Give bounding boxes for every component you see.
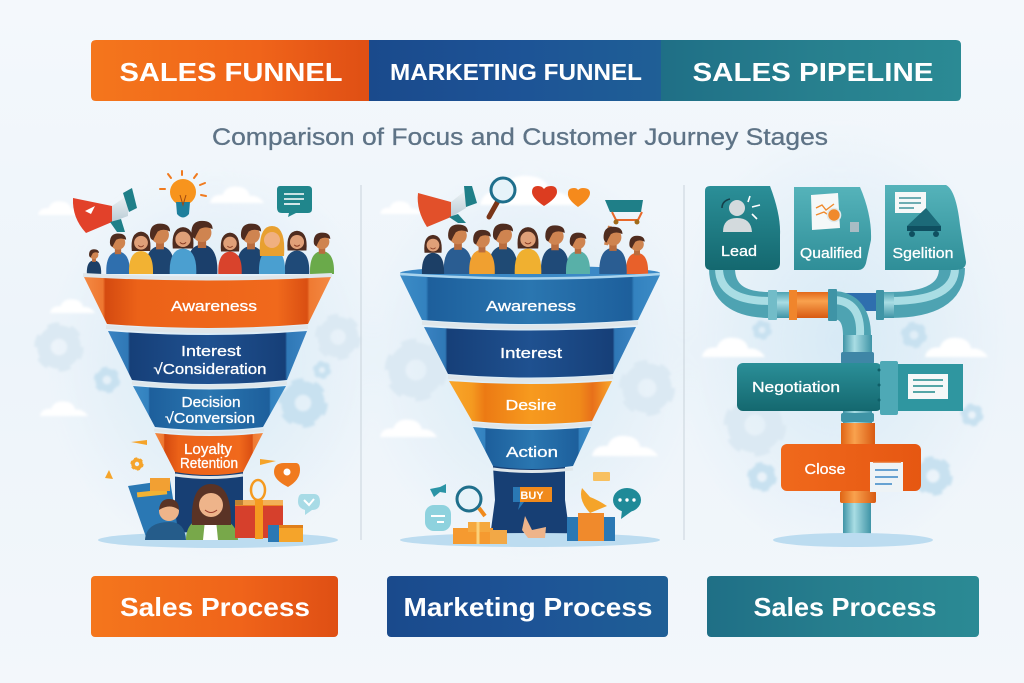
funnel band: Interest / Consideration: Interest	[181, 343, 242, 360]
panel: sales pipeline	[705, 185, 966, 547]
stage card: Lead	[705, 186, 780, 270]
stage card: Qualified	[794, 187, 871, 270]
funnel band: Action: Action	[506, 444, 558, 461]
footer label: Sales Process: Sales Process	[120, 592, 310, 622]
funnel band: Awareness: Awareness	[486, 298, 576, 315]
icon: chat bubble	[277, 186, 312, 217]
funnel band: Interest	[424, 327, 636, 378]
panel: marketing funnel	[400, 178, 660, 547]
funnel rim and dividers	[400, 274, 660, 472]
funnel band: Awareness: Awareness	[171, 298, 257, 315]
funnel band: Loyalty / Retention: Loyalty	[184, 441, 233, 458]
subtitle: Comparison of Focus and Customer Journey Stages	[212, 124, 828, 151]
crowd of people	[422, 224, 648, 274]
panel: sales funnel	[73, 171, 338, 548]
stage card: Qualified: Qualified	[800, 245, 862, 262]
funnel interior	[400, 266, 660, 280]
stage bar: Close: Close	[804, 461, 846, 478]
funnel band: Loyalty / Retention	[155, 433, 263, 475]
funnel band: Action	[473, 427, 591, 469]
icon: light bulb	[160, 171, 206, 218]
stage card: Lead: Lead	[721, 243, 757, 260]
funnel band: Interest / Consideration	[108, 331, 307, 384]
icon: document card	[128, 478, 178, 537]
icon: magnifying glass	[489, 178, 515, 217]
stage bar: Negotiation	[737, 361, 963, 415]
base ellipse	[400, 533, 660, 547]
stage bar: Negotiation: Negotiation	[752, 379, 840, 396]
footer label: Sales Process	[91, 576, 338, 637]
base ellipse	[98, 532, 338, 548]
small icons around the base	[105, 440, 320, 515]
footer label: Sales Process (pipeline)	[707, 576, 979, 637]
funnel band: Decision / Conversion	[133, 386, 286, 430]
icon: red heart	[532, 186, 557, 206]
icon: shopping cart	[605, 200, 643, 245]
funnel band: Desire: Desire	[506, 397, 556, 414]
footer label: Marketing Process: Marketing Process	[404, 592, 652, 622]
funnel band: Awareness	[400, 275, 660, 324]
header tab: Sales Funnel	[91, 40, 369, 101]
stage card: Sgelition: Sgelition	[892, 245, 954, 262]
funnel band: Awareness	[83, 275, 332, 328]
funnel band: Decision / Conversion: √Conversion	[165, 410, 255, 427]
header tab: Sales Funnel: SALES FUNNEL	[120, 57, 343, 87]
funnel neck	[175, 470, 243, 542]
pipe network	[719, 268, 955, 537]
icon: orange heart	[568, 188, 590, 207]
header tab: Sales Pipeline: SALES PIPELINE	[692, 57, 934, 87]
stage card: Sgelition	[885, 185, 966, 270]
footer label: Sales Process (pipeline): Sales Process	[754, 592, 936, 622]
funnel band: Interest: Interest	[500, 345, 563, 362]
icon: buy tag and pointing hand: BUY	[520, 490, 544, 502]
stage bar: Close	[781, 444, 921, 492]
icon: megaphone	[418, 186, 477, 227]
icon: buy tag and pointing hand	[513, 487, 552, 538]
funnel neck	[490, 466, 570, 537]
crowd of people	[87, 221, 334, 274]
base ellipse	[773, 533, 933, 547]
icon: chat bubbles	[425, 484, 641, 531]
header tab: Marketing Funnel	[369, 40, 661, 101]
funnel band: Desire	[449, 381, 612, 424]
header tabs	[91, 40, 961, 101]
funnel band: Loyalty / Retention: Retention	[180, 455, 238, 472]
background decorations: gears and clouds	[38, 120, 1010, 560]
column dividers	[361, 185, 684, 540]
icon: gift boxes	[235, 480, 303, 542]
footer label: Marketing Process	[387, 576, 668, 637]
header tab: Sales Pipeline	[661, 40, 961, 101]
icon: megaphone	[73, 188, 137, 233]
funnel band: Decision / Conversion: Decision	[182, 394, 240, 411]
icon: magnifying glass and boxes	[453, 487, 507, 544]
icon: woman and child	[145, 484, 238, 540]
header tab: Marketing Funnel: MARKETING FUNNEL	[390, 59, 642, 85]
icon: open gift box	[567, 472, 615, 541]
funnel band: Interest / Consideration: √Consideration	[154, 361, 266, 378]
funnel rim and dividers	[83, 275, 332, 478]
